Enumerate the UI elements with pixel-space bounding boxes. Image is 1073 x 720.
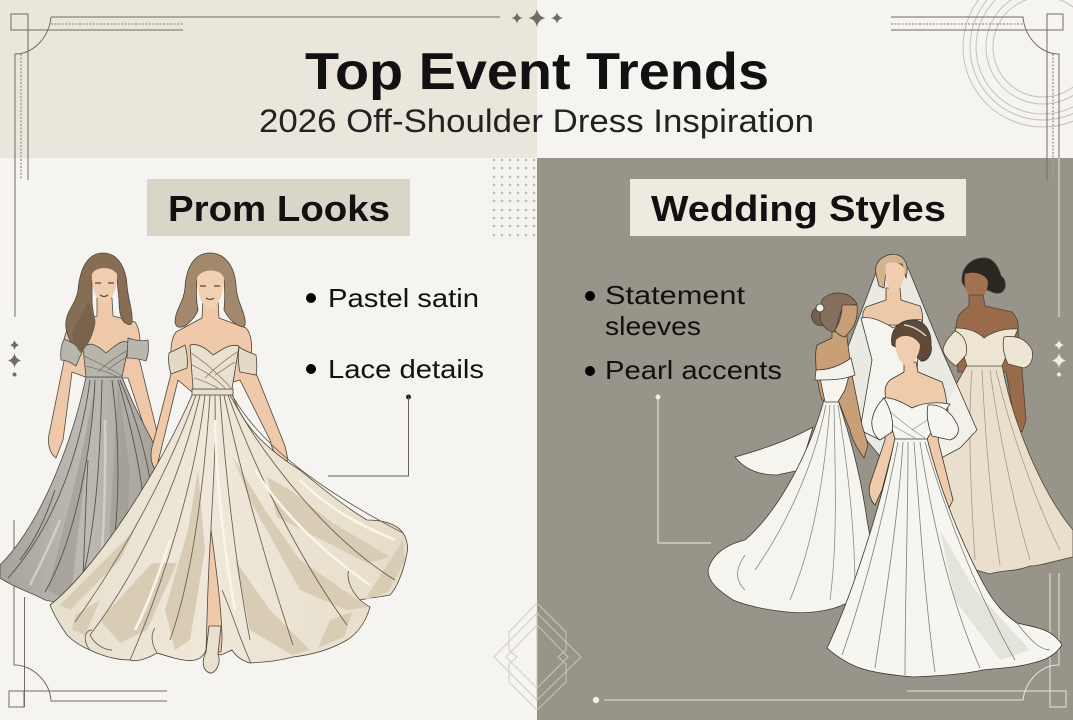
panel: wedding background bbox=[537, 158, 1073, 720]
bodice bbox=[883, 398, 950, 439]
leg bbox=[206, 530, 222, 652]
skirt folds bbox=[738, 405, 855, 600]
bodice bbox=[820, 372, 850, 402]
skirt shaded panels bbox=[60, 457, 405, 655]
illustration: cream prom dress figure bbox=[50, 253, 408, 673]
sleeve bbox=[815, 358, 855, 380]
skin back and arm bbox=[816, 330, 868, 458]
face bbox=[92, 268, 117, 303]
bodice bbox=[190, 345, 239, 389]
wedding bullets: Pearl accents bbox=[605, 355, 782, 385]
bodice pleats bbox=[84, 350, 128, 377]
skirt bbox=[50, 393, 408, 663]
panel: prom heading bbox=[147, 179, 410, 236]
illustration: wedding figure, side-facing bride with train bbox=[708, 293, 880, 613]
face bbox=[885, 262, 905, 293]
callout: prom leader bbox=[328, 394, 411, 476]
face bbox=[835, 305, 857, 337]
concentric circles bbox=[963, 0, 1073, 127]
illustration: wedding figure, dark-haired bride in cream bbox=[925, 258, 1073, 574]
face bbox=[197, 270, 224, 309]
skirt shading bbox=[48, 382, 130, 602]
ornament: bottom-right corner bbox=[604, 573, 1066, 707]
skirt folds bbox=[970, 370, 1060, 565]
ornament: overlapping diamonds bbox=[494, 603, 581, 710]
bodice bbox=[955, 328, 1018, 366]
bodice folds bbox=[888, 410, 940, 438]
sparkles: left bbox=[8, 340, 21, 376]
skirt highlights bbox=[135, 420, 395, 630]
background: header left band bbox=[0, 0, 537, 158]
sleeves bbox=[169, 345, 187, 374]
illustration: wedding figure, front bride bbox=[827, 320, 1062, 677]
prom bullets: Pastel satin bbox=[328, 283, 479, 313]
bodice bbox=[83, 342, 129, 377]
ornament: bottom-left corner bbox=[9, 520, 167, 707]
prom bullets bbox=[306, 283, 484, 384]
skirt bbox=[708, 400, 880, 613]
skirt bbox=[827, 438, 1062, 677]
eyes and lips bbox=[95, 283, 114, 296]
skin neck, shoulders and arms bbox=[869, 362, 953, 510]
wedding bullets: Statement bbox=[605, 280, 746, 310]
flower bbox=[816, 304, 824, 312]
dress bbox=[860, 318, 922, 440]
hair bbox=[962, 258, 1005, 293]
face bbox=[896, 336, 920, 366]
waistband bbox=[192, 389, 233, 395]
skirt folds bbox=[8, 380, 150, 603]
wedding bullets bbox=[585, 280, 782, 385]
hair bbox=[820, 293, 857, 332]
wedding bullets: sleeves bbox=[605, 311, 701, 341]
veil bbox=[846, 262, 977, 480]
callout: wedding leader bbox=[656, 394, 711, 543]
skin: arms and shoulders bbox=[48, 298, 158, 458]
sleeves bbox=[61, 339, 82, 366]
skirt folds bbox=[75, 395, 403, 663]
train bbox=[735, 427, 813, 475]
hair bbox=[66, 253, 132, 353]
bun bbox=[812, 306, 830, 326]
illustration: grey prom dress figure bbox=[0, 253, 170, 603]
neck and shoulders bbox=[863, 288, 923, 325]
tiara bbox=[904, 325, 926, 336]
hair strand over shoulder bbox=[72, 300, 94, 353]
ornament: top-left corner bbox=[11, 14, 500, 317]
subtitle: 2026 Off-Shoulder Dress Inspiration bbox=[259, 103, 814, 139]
skirt bbox=[925, 365, 1073, 574]
puff sleeve right bbox=[1003, 336, 1033, 368]
panel: wedding heading bbox=[630, 179, 966, 236]
ornament: top-right corner bbox=[891, 14, 1063, 317]
ornament: line end dot bbox=[593, 697, 599, 703]
skirt folds bbox=[842, 442, 1050, 675]
skin: arms and shoulders bbox=[151, 300, 288, 470]
hair bbox=[175, 253, 245, 327]
sparkles: right bbox=[1052, 340, 1066, 376]
skirt shading bbox=[940, 530, 1030, 660]
panel: prom heading: Prom Looks bbox=[168, 188, 390, 229]
light fold highlights bbox=[30, 420, 105, 590]
puff sleeve left bbox=[943, 331, 967, 366]
hair bbox=[892, 320, 931, 361]
shoe bbox=[203, 626, 221, 673]
puff sleeve left bbox=[872, 398, 893, 440]
prom bullets: Lace details bbox=[328, 354, 484, 384]
skin bbox=[956, 295, 1026, 432]
sparkles: top bbox=[512, 9, 563, 27]
hair bbox=[876, 254, 907, 288]
face bbox=[965, 273, 988, 300]
illustration: wedding figure, blonde bride with veil bbox=[846, 254, 977, 480]
panel: wedding heading: Wedding Styles bbox=[651, 188, 946, 229]
title: Top Event Trends bbox=[305, 43, 769, 101]
bodice pleats bbox=[191, 352, 237, 388]
eyes and lips bbox=[200, 286, 220, 300]
dot grid bbox=[493, 159, 535, 236]
skirt bbox=[0, 377, 170, 603]
puff sleeve right bbox=[927, 405, 958, 440]
